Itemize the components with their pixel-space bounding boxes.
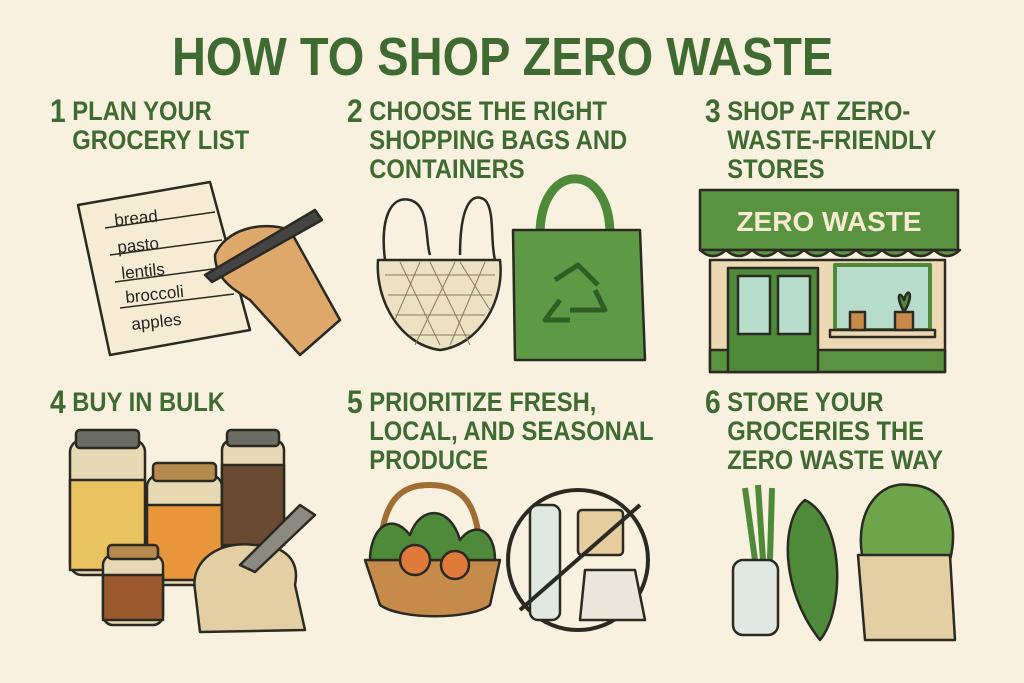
heading 2: SHOPPING BAGS AND	[369, 125, 627, 155]
icon: notepad and hand	[78, 182, 340, 355]
icon: zero waste store: ZERO WASTE	[736, 206, 922, 237]
heading 3: 3	[705, 93, 721, 129]
icon: basket and crossed-out plastic	[365, 485, 648, 630]
heading 5: LOCAL, AND SEASONAL	[369, 416, 654, 446]
heading 5	[347, 384, 654, 475]
heading 6: STORE YOUR	[727, 387, 884, 417]
heading 5: PRODUCE	[369, 445, 488, 475]
heading 1: PLAN YOUR	[72, 96, 212, 126]
icon: bulk jars	[70, 430, 315, 632]
heading 1	[50, 93, 249, 155]
heading 6	[705, 384, 943, 475]
icon: notepad and hand: pasto	[116, 234, 160, 257]
icon: notepad and hand: broccoli	[124, 282, 185, 307]
heading 4: 4	[50, 384, 66, 420]
heading 3	[705, 93, 936, 184]
icon: mesh bag and tote	[378, 179, 645, 360]
heading 5: 5	[347, 384, 363, 420]
heading 3: STORES	[727, 154, 825, 184]
heading 3: SHOP AT ZERO-	[727, 96, 910, 126]
heading 1: GROCERY LIST	[72, 125, 249, 155]
heading 2: CHOOSE THE RIGHT	[369, 96, 607, 126]
heading 2	[347, 93, 627, 184]
heading 6: 6	[705, 384, 721, 420]
heading 4: BUY IN BULK	[72, 387, 225, 417]
heading 6: GROCERIES THE	[727, 416, 924, 446]
heading 2: CONTAINERS	[369, 154, 525, 184]
heading 6: ZERO WASTE WAY	[727, 445, 943, 475]
heading 1: 1	[50, 93, 66, 129]
icon: zero waste store	[700, 190, 960, 372]
heading 5: PRIORITIZE FRESH,	[369, 387, 596, 417]
icon: notepad and hand: bread	[113, 207, 159, 230]
icon: notepad and hand: apples	[130, 310, 182, 334]
icon: storage	[733, 484, 955, 640]
title: HOW TO SHOP ZERO WASTE	[172, 27, 833, 87]
icon: notepad and hand: lentils	[120, 260, 166, 283]
heading 2: 2	[347, 93, 363, 129]
heading 3: WASTE-FRIENDLY	[727, 125, 936, 155]
